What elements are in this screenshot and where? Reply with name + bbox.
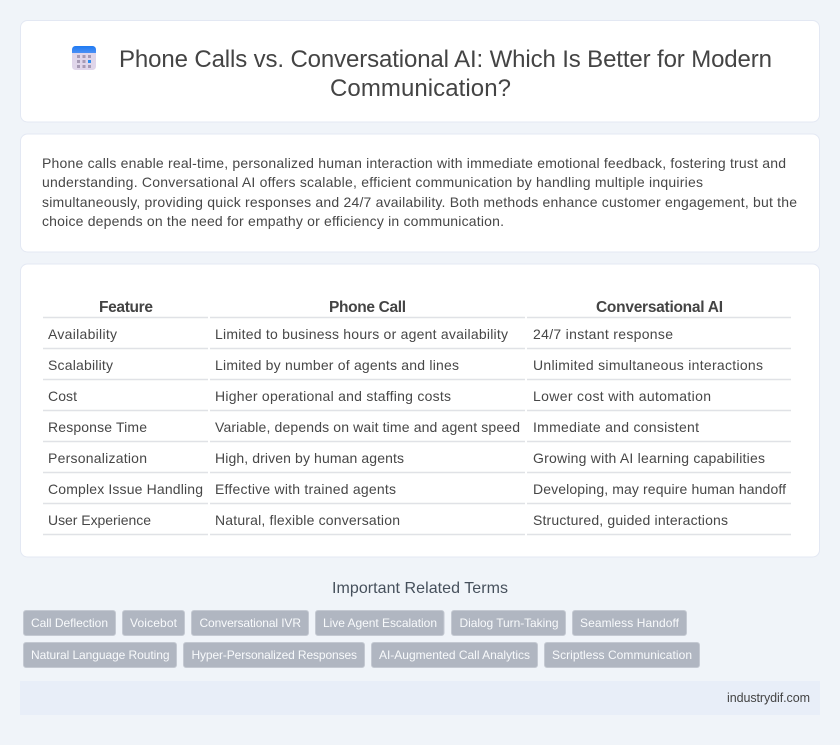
row: scalability: Scalability	[48, 357, 113, 373]
header panel	[20, 20, 820, 122]
intro text: Phone calls enable real-time, personalized human interaction with immediate emotional feedback, fostering trust and	[42, 155, 786, 171]
tag	[192, 610, 308, 636]
row: complex issue handling: Effective with trained agents	[215, 481, 396, 497]
row: user experience: Structured, guided interactions	[533, 512, 728, 528]
title	[119, 46, 772, 102]
row: complex issue handling: Complex Issue Handling	[48, 481, 203, 497]
row: scalability	[48, 357, 763, 373]
tags: related terms	[24, 610, 700, 668]
tag	[24, 610, 116, 636]
row: response time: Response Time	[48, 419, 147, 435]
tag: Scriptless Communication	[552, 648, 692, 662]
row: availability	[48, 326, 673, 342]
row: response time	[48, 419, 699, 435]
row: cost: Cost	[48, 388, 77, 404]
footer	[20, 681, 820, 715]
table header: Phone Call	[329, 299, 406, 316]
row: response time: Immediate and consistent	[533, 419, 699, 435]
tag	[452, 610, 566, 636]
tag: Live Agent Escalation	[323, 616, 437, 630]
row: complex issue handling: Developing, may require human handoff	[533, 481, 786, 497]
table header: Conversational AI	[596, 299, 723, 316]
panel: comparison table	[20, 264, 820, 557]
tag: Dialog Turn-Taking	[460, 616, 558, 630]
tag	[572, 610, 686, 636]
tag	[544, 642, 700, 668]
heading: important related terms: Important Related Terms	[332, 580, 508, 597]
row: scalability: Unlimited simultaneous interactions	[533, 357, 763, 373]
icon: calendar	[72, 46, 96, 70]
panel: introduction	[20, 134, 820, 252]
tag: Conversational IVR	[200, 616, 301, 630]
row: personalization: Personalization	[48, 450, 147, 466]
intro text: understanding. Conversational AI offers scalable, efficient communication by handling multiple inquiries	[42, 174, 703, 190]
row: availability: Limited to business hours or agent availability	[215, 326, 508, 342]
row: cost: Higher operational and staffing costs	[215, 388, 451, 404]
table header: Feature	[99, 299, 153, 316]
row: scalability: Limited by number of agents and lines	[215, 357, 459, 373]
tag: Natural Language Routing	[31, 648, 170, 662]
table header	[99, 299, 723, 316]
row: complex issue handling	[48, 481, 786, 497]
tag	[372, 642, 538, 668]
intro text: simultaneously, providing quick responses and 24/7 availability. Both methods enhance customer engagement, but the	[42, 194, 797, 210]
tag: Call Deflection	[31, 616, 108, 630]
row: availability: Availability	[48, 326, 117, 342]
tag: AI-Augmented Call Analytics	[379, 648, 530, 662]
tag	[316, 610, 444, 636]
row: personalization	[48, 450, 765, 466]
row: user experience: User Experience	[48, 512, 151, 528]
row: cost: Lower cost with automation	[533, 388, 711, 404]
tag: Voicebot	[130, 616, 178, 630]
row: availability: 24/7 instant response	[533, 326, 673, 342]
title: Phone Calls vs. Conversational AI: Which Is Better for Modern	[119, 46, 772, 73]
row: cost	[48, 388, 711, 404]
tag	[184, 642, 364, 668]
tag	[122, 610, 184, 636]
tag	[24, 642, 176, 668]
row: personalization: High, driven by human agents	[215, 450, 404, 466]
intro text: choice depends on the need for empathy or efficiency in communication.	[42, 213, 504, 229]
row: personalization: Growing with AI learning capabilities	[533, 450, 765, 466]
tag: Seamless Handoff	[580, 616, 680, 630]
tag: Hyper-Personalized Responses	[192, 648, 357, 662]
row: user experience	[48, 512, 728, 528]
title: Communication?	[330, 75, 511, 102]
row: user experience: Natural, flexible conversation	[215, 512, 400, 528]
row: response time: Variable, depends on wait time and agent speed	[215, 419, 520, 435]
footer source text: industrydif.com	[727, 691, 810, 705]
intro text	[42, 155, 797, 229]
